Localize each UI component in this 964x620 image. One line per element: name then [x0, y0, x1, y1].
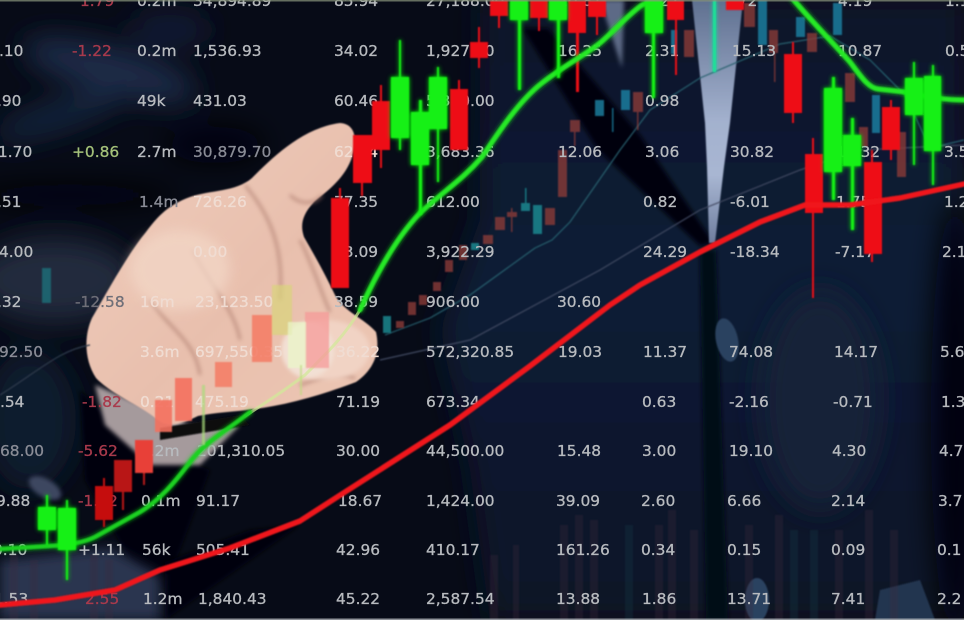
row 8: 74.08 [729, 343, 773, 361]
row 13: 2,587.54 [426, 590, 495, 608]
row 12: 161.26 [556, 541, 610, 559]
row 11: 2.60 [641, 492, 675, 510]
row 4: 30.82 [730, 143, 774, 161]
row 12: 0.15 [727, 541, 761, 559]
row 9: .54 [0, 393, 24, 411]
row 8: 14.17 [834, 343, 878, 361]
row 5: 726.26 [193, 193, 247, 211]
row 2 [0, 42, 964, 60]
row 4: 3,683.36 [426, 143, 495, 161]
row 1 [80, 0, 964, 10]
row 2: 1,536.93 [193, 42, 262, 60]
row 10: 1.2m [140, 442, 179, 460]
row 7: 906.00 [426, 293, 480, 311]
row 5 [0, 193, 964, 211]
row 11: -1.92 [78, 492, 118, 510]
row 12: 0.34 [641, 541, 675, 559]
row 13: 45.22 [336, 590, 380, 608]
row 6: 0.00 [193, 243, 227, 261]
row 10: 3.00 [642, 442, 676, 460]
red candlesticks [331, 0, 900, 298]
row 13: 13.88 [556, 590, 600, 608]
row 5: 1.4m [139, 193, 178, 211]
row 5: 77.35 [334, 193, 378, 211]
row 10: 4.7 [939, 442, 963, 460]
row 7: 23,123.50 [195, 293, 273, 311]
volume bars [10, 510, 898, 620]
row 11: 91.17 [196, 492, 240, 510]
row 12: 42.96 [336, 541, 380, 559]
row 10: 4.30 [832, 442, 866, 460]
row 5: 612.00 [426, 193, 480, 211]
faded candlesticks over hand [95, 285, 329, 527]
row 6 [0, 243, 964, 261]
row 6: 23.09 [334, 243, 378, 261]
row 4: 2.7m [137, 143, 176, 161]
row 13: 2.55 [85, 590, 119, 608]
red trend line [0, 184, 964, 605]
row 11: 1,424.00 [426, 492, 495, 510]
row 13: 13.71 [727, 590, 771, 608]
row 2: 10.87 [838, 42, 882, 60]
row 4: 11.32 [836, 143, 880, 161]
row 7: 30.60 [557, 293, 601, 311]
row 8: 3.6m [140, 343, 179, 361]
row 4 [0, 143, 964, 161]
row 7: -12.58 [75, 293, 125, 311]
row 4: 62.34 [334, 143, 378, 161]
row 8: 92.50 [0, 343, 43, 361]
row 3: 60.46 [334, 92, 378, 110]
row 9 [0, 393, 964, 411]
row 12: +1.11 [78, 541, 125, 559]
row 7: 38.59 [334, 293, 378, 311]
row 5: 0.82 [643, 193, 677, 211]
row 3: 431.03 [193, 92, 247, 110]
row 3: 5,380.00 [426, 92, 495, 110]
row 2: 16.25 [558, 42, 602, 60]
row 11: 18.67 [338, 492, 382, 510]
row 11: 0.1m [141, 492, 180, 510]
row 2: 34.02 [334, 42, 378, 60]
jacket buttons [712, 316, 742, 364]
row 13: 1.86 [642, 590, 676, 608]
row 8 [0, 343, 964, 361]
shirt and tie [600, 0, 624, 68]
row 8: 697,550.35 [195, 343, 283, 361]
row 8: 36.22 [336, 343, 380, 361]
row 3: 49k [137, 92, 166, 110]
row 4: 3.06 [645, 143, 679, 161]
row 10: 201,310.05 [197, 442, 285, 460]
row 6: -18.34 [730, 243, 780, 261]
row 8: 19.03 [558, 343, 602, 361]
row 9: -0.71 [833, 393, 873, 411]
row 2: 0.2m [137, 42, 176, 60]
row 9: -2.16 [729, 393, 769, 411]
hand [86, 123, 377, 424]
row 2: 2.31 [645, 42, 679, 60]
row 6: 4.00 [0, 243, 33, 261]
suit centre seam [700, 250, 728, 620]
row 11: 6.66 [727, 492, 761, 510]
row 10: 19.10 [729, 442, 773, 460]
row 4: +0.86 [72, 143, 119, 161]
row 12: 410.17 [426, 541, 480, 559]
row 12: 0.09 [831, 541, 865, 559]
row 11: 39.09 [556, 492, 600, 510]
lapel shadow [522, 28, 714, 246]
row 9: 71.19 [336, 393, 380, 411]
row 6: 24.29 [643, 243, 687, 261]
row 2: -1.22 [72, 42, 112, 60]
row 11 [0, 492, 962, 510]
row 7 [0, 293, 601, 311]
row 10 [0, 442, 963, 460]
row 4: 12.06 [558, 143, 602, 161]
row 13 [0, 590, 961, 608]
row 9: 475.19 [195, 393, 249, 411]
row 3: 0.98 [645, 92, 679, 110]
row 13: 7.41 [831, 590, 865, 608]
row 11: 3.7 [938, 492, 962, 510]
thin indicator lines [0, 36, 964, 395]
row 8: 11.37 [643, 343, 687, 361]
row 6: 3,922.29 [426, 243, 495, 261]
row 10: -5.62 [78, 442, 118, 460]
row 9: -1.82 [82, 393, 122, 411]
row 5: 1.75 [836, 193, 870, 211]
row 11: 2.14 [831, 492, 865, 510]
lower left shirt patch [0, 548, 160, 620]
row 13: 1.2m [143, 590, 182, 608]
row 8: 572,320.85 [426, 343, 514, 361]
row 12: 56k [142, 541, 171, 559]
row 9: 0.21 [140, 393, 174, 411]
sleeve and cuff [80, 390, 210, 590]
row 7: 16m [140, 293, 175, 311]
row 10: 30.00 [336, 442, 380, 460]
row 12: 0.1 [937, 541, 961, 559]
row 6: -7.17 [835, 243, 875, 261]
row 13: 2.2 [937, 590, 961, 608]
row 4: 30,879.70 [193, 143, 271, 161]
row 9: 673.34 [426, 393, 480, 411]
row 5: -6.01 [730, 193, 770, 211]
muted candlesticks [42, 0, 906, 333]
row 10: 15.48 [557, 442, 601, 460]
row 8: 5.6 [940, 343, 964, 361]
row 12: 505.41 [196, 541, 250, 559]
row 2: 15.13 [732, 42, 776, 60]
row 13: 1,840.43 [198, 590, 267, 608]
row 2: 1,927.00 [426, 42, 495, 60]
row 12 [0, 541, 961, 559]
row 9: 0.63 [642, 393, 676, 411]
row 3 [0, 92, 679, 110]
row 10: 44,500.00 [426, 442, 504, 460]
row 10: 68.00 [0, 442, 44, 460]
